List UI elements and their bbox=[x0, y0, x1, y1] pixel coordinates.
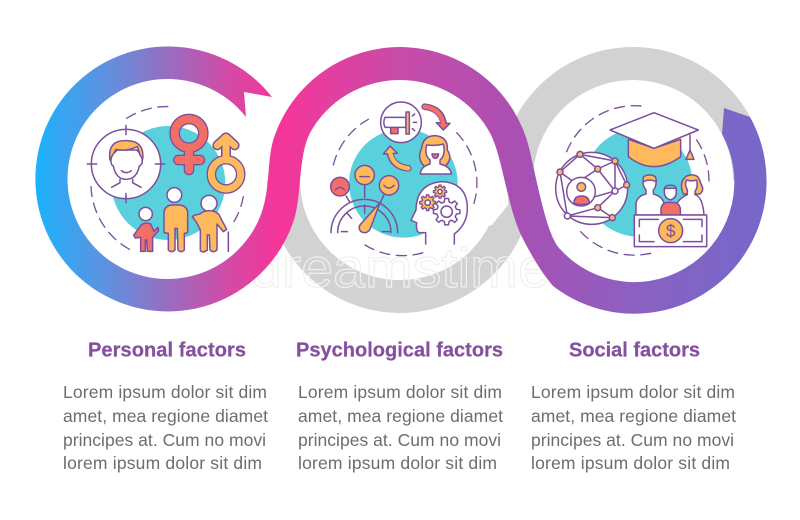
text block bbox=[63, 382, 268, 473]
text block: amet, mea regione diamet bbox=[298, 406, 503, 426]
heading: Social factors bbox=[569, 340, 700, 362]
icon: psychological factors bbox=[331, 102, 477, 256]
text block: lorem ipsum dolor sit dim bbox=[298, 453, 497, 473]
teal backdrop bbox=[349, 129, 458, 238]
icon: graduation cap bbox=[610, 113, 698, 167]
teal backdrop bbox=[111, 126, 225, 240]
icon: child bbox=[134, 207, 159, 251]
text block: principes at. Cum no movi bbox=[298, 430, 501, 450]
gradient ribbon bbox=[35, 46, 767, 314]
text block: Lorem ipsum dolor sit dim bbox=[298, 382, 502, 402]
icon: megaphone bbox=[381, 102, 421, 143]
icon: target person bbox=[87, 125, 165, 203]
text block: Lorem ipsum dolor sit dim bbox=[531, 382, 735, 402]
icon: gauge bbox=[331, 199, 398, 233]
panel: personal factors text bbox=[63, 340, 268, 473]
arrow: yellow curve bbox=[383, 146, 408, 168]
text block: lorem ipsum dolor sit dim bbox=[63, 453, 262, 473]
icon: woman bbox=[420, 136, 451, 174]
text block: amet, mea regione diamet bbox=[531, 406, 736, 426]
icon: adult bbox=[164, 188, 188, 252]
icon: man in family bbox=[636, 175, 664, 215]
icon: happy face bbox=[379, 176, 399, 202]
gray arc: right circle bbox=[516, 63, 750, 180]
icon: woman in family bbox=[677, 175, 704, 215]
text block bbox=[298, 382, 503, 473]
text block: lorem ipsum dolor sit dim bbox=[531, 453, 730, 473]
heading: Psychological factors bbox=[296, 340, 503, 362]
text block: Lorem ipsum dolor sit dim bbox=[63, 382, 267, 402]
icon: mars symbol bbox=[211, 137, 241, 189]
panel: social factors text bbox=[531, 340, 736, 473]
icon: personal factors bbox=[87, 107, 243, 252]
icon: neutral face bbox=[355, 165, 374, 197]
white cut at the second crossing bbox=[470, 130, 510, 230]
dashed orbit bbox=[91, 107, 243, 252]
gear: large bbox=[433, 198, 460, 225]
icon: head with gears bbox=[411, 182, 467, 244]
gray arc: middle circle bbox=[284, 180, 516, 296]
teal backdrop bbox=[584, 129, 692, 237]
watermark: dreamstime bbox=[250, 236, 550, 299]
text block: principes at. Cum no movi bbox=[531, 430, 734, 450]
dashed orbit bbox=[333, 119, 477, 256]
gear: left bbox=[420, 195, 436, 211]
icon: dollar bill: $ bbox=[666, 221, 676, 241]
arrow: coral curve bbox=[425, 107, 450, 130]
icon: social factors bbox=[556, 106, 709, 255]
icon: network globe bbox=[556, 151, 630, 224]
icon: venus symbol bbox=[175, 119, 203, 170]
heading: Personal factors bbox=[88, 340, 246, 362]
text block: amet, mea regione diamet bbox=[63, 406, 268, 426]
icon: boy in family bbox=[661, 185, 680, 215]
panel: psychological factors text bbox=[296, 340, 503, 473]
icon: elder with cane bbox=[192, 195, 228, 252]
icon: sad face bbox=[331, 177, 349, 201]
gear: top bbox=[433, 185, 447, 198]
text block: principes at. Cum no movi bbox=[63, 430, 266, 450]
text block bbox=[531, 382, 736, 473]
dashed orbit bbox=[567, 106, 709, 255]
icon: dollar bill bbox=[634, 215, 707, 247]
